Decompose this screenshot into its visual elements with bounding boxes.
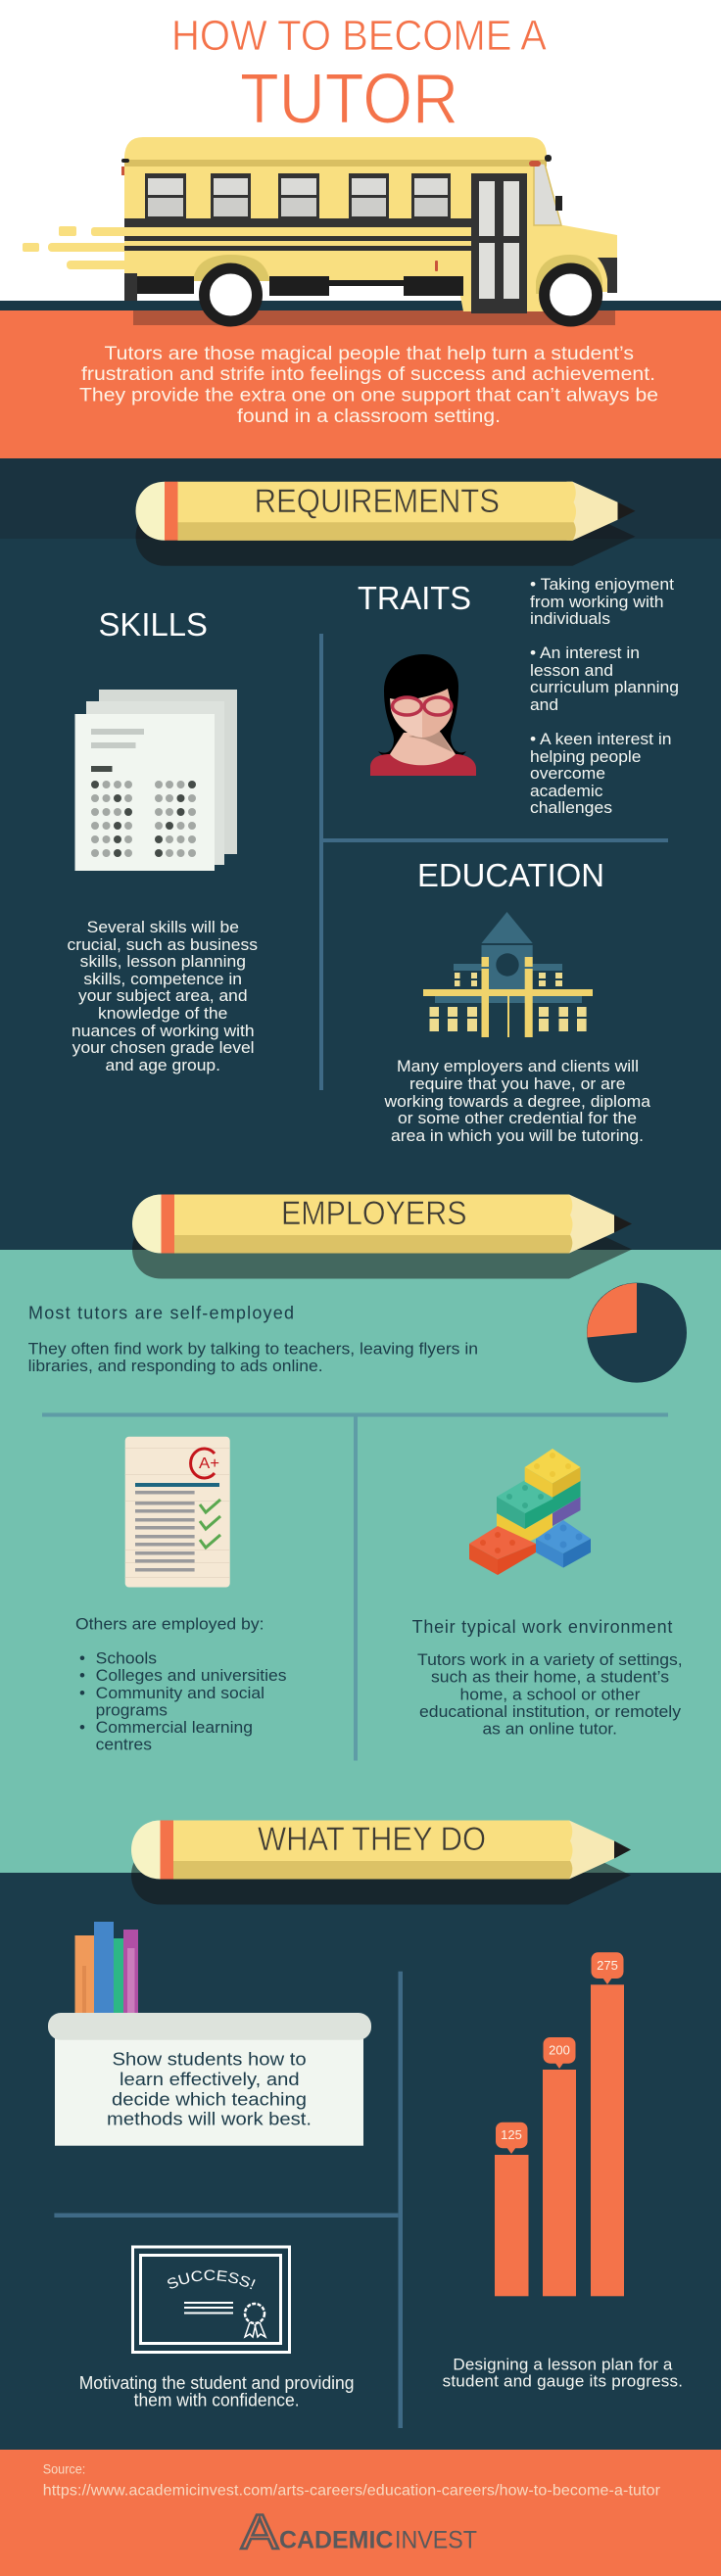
panel: employers [0, 1195, 721, 1873]
pie chart [587, 1283, 687, 1383]
motivating text: them with confidence. [134, 2391, 300, 2410]
self-employed text [28, 1303, 478, 1375]
bar chart [495, 1952, 624, 2296]
icon: toy bricks [469, 1449, 591, 1575]
traits list: from working with [530, 593, 664, 611]
skills text: knowledge of the [98, 1005, 227, 1023]
education text: area in which you will be tutoring. [391, 1127, 644, 1145]
dividers [319, 634, 668, 1090]
title [171, 12, 548, 139]
logo: academic invest: A [241, 2504, 279, 2559]
card: show students: methods will work best. [107, 2109, 312, 2129]
others employed list: centres [96, 1736, 152, 1754]
heading: traits: TRAITS [358, 580, 471, 616]
dividers [42, 1412, 668, 1761]
traits list: challenges [530, 798, 612, 817]
pencil heading: employers: EMPLOYERS [281, 1195, 466, 1232]
panel: requirements [0, 458, 721, 1250]
traits list: lesson and [530, 661, 613, 680]
work environment text: Tutors work in a variety of settings, [417, 1650, 683, 1669]
icon: tutor with glasses [370, 654, 476, 776]
panel: footer [0, 2450, 721, 2576]
others employed list: Schools [96, 1649, 157, 1668]
work environment text: educational institution, or remotely [419, 1702, 682, 1721]
logo: academic invest: CADEMIC [279, 2527, 393, 2554]
icon: success certificate: SUCCESS! [168, 2270, 256, 2290]
others employed list: Colleges and universities [96, 1666, 286, 1685]
work environment text [412, 1617, 683, 1738]
icon: success certificate [131, 2245, 291, 2354]
traits list: curriculum planning [530, 678, 679, 696]
skills text: skills, competence in [83, 971, 242, 988]
card: show students: learn effectively, and [120, 2069, 300, 2089]
others employed list [75, 1615, 286, 1754]
skills text: and age group. [106, 1057, 220, 1074]
card: show students: decide which teaching [112, 2088, 307, 2109]
title: TUTOR [240, 61, 458, 139]
work environment text: home, a school or other [460, 1685, 641, 1703]
footer background [0, 2450, 721, 2576]
lesson plan text [443, 2355, 683, 2391]
self-employed text: libraries, and responding to ads online. [28, 1357, 323, 1375]
traits list: • A keen interest in [530, 730, 672, 748]
skills text [67, 919, 258, 1074]
icon: graded test paper: A+ [199, 1455, 219, 1472]
traits list: individuals [530, 609, 610, 628]
skills text: your chosen grade level [72, 1039, 255, 1057]
panel: what they do [0, 1820, 721, 2450]
others employed list: Others are employed by: [75, 1615, 264, 1634]
self-employed text: They often find work by talking to teachers, leaving flyers in [28, 1340, 478, 1358]
education text [383, 1058, 651, 1145]
icon: books [74, 1922, 138, 2013]
lesson plan text: Designing a lesson plan for a [453, 2355, 673, 2373]
intro text: Tutors are those magical people that help turn a student’s [104, 343, 634, 364]
skills text: Several skills will be [87, 919, 239, 936]
dividers [54, 1972, 403, 2428]
card: show students: Show students how to [112, 2049, 307, 2070]
traits list: • Taking enjoyment [530, 575, 674, 594]
bar chart: 125 [501, 2127, 522, 2142]
others employed list: Commercial learning [96, 1718, 253, 1737]
source: https://www.academicinvest.com/arts-careers/education-careers/how-to-become-a-tutor [43, 2483, 661, 2500]
bar chart: 200 [549, 2043, 570, 2057]
self-employed text: Most tutors are self-employed [28, 1303, 294, 1322]
bus shadow [133, 310, 615, 325]
intro text: They provide the extra one on one support that can’t always be [79, 384, 658, 405]
icon: graded test paper [125, 1437, 230, 1587]
traits list: academic [530, 782, 603, 800]
icon: school building [423, 912, 593, 1037]
road strip [0, 301, 721, 310]
card: show students [48, 2013, 371, 2146]
section background [0, 1873, 721, 2450]
source: Source: [43, 2461, 85, 2477]
others employed list: • [79, 1666, 85, 1685]
title: HOW TO BECOME A [171, 12, 548, 60]
motivating text [79, 2373, 354, 2410]
source [43, 2461, 661, 2500]
others employed list: • [79, 1718, 85, 1737]
pencil heading: what they do [131, 1820, 631, 1904]
others employed list: programs [96, 1700, 168, 1719]
skills text: your subject area, and [78, 987, 248, 1005]
icon: school bus [23, 137, 617, 321]
traits list: • An interest in [530, 644, 640, 662]
motivating text: Motivating the student and providing [79, 2373, 354, 2393]
heading: education: EDUCATION [417, 857, 604, 893]
logo: academic invest [241, 2504, 477, 2559]
pencil heading: requirements [135, 482, 635, 566]
lesson plan text: student and gauge its progress. [443, 2372, 683, 2391]
work environment text: Their typical work environment [412, 1617, 672, 1637]
panel: intro band [0, 310, 721, 458]
traits list: overcome [530, 764, 605, 783]
education text: require that you have, or are [409, 1075, 625, 1093]
logo: academic invest: INVEST [395, 2527, 477, 2554]
traits list: and [530, 695, 558, 714]
pencil heading: employers [132, 1195, 632, 1279]
education text: or some other credential for the [398, 1110, 637, 1127]
work environment text: as an online tutor. [482, 1720, 617, 1738]
pencil heading: what they do: WHAT THEY DO [258, 1821, 486, 1858]
education text: Many employers and clients will [397, 1058, 639, 1075]
intro text: found in a classroom setting. [237, 405, 501, 427]
section background [0, 1250, 721, 1873]
skills text: crucial, such as business [67, 936, 258, 954]
intro text: frustration and strife into feelings of success and achievement. [81, 363, 655, 385]
panel: header [0, 12, 721, 458]
others employed list: Community and social [96, 1684, 264, 1702]
skills text: nuances of working with [72, 1023, 255, 1040]
traits list [530, 575, 679, 817]
education text: working towards a degree, diploma [383, 1093, 651, 1111]
traits list: helping people [530, 747, 641, 766]
icon: answer sheets [74, 690, 237, 871]
others employed list: • [79, 1649, 85, 1668]
heading: skills: SKILLS [98, 606, 208, 643]
work environment text: such as their home, a student’s [431, 1668, 669, 1687]
intro text [79, 343, 658, 427]
section background [0, 458, 721, 1250]
skills text: skills, lesson planning [80, 953, 246, 971]
bar chart: 275 [597, 1958, 618, 1973]
others employed list: • [79, 1684, 85, 1702]
pencil heading: requirements: REQUIREMENTS [255, 483, 500, 520]
